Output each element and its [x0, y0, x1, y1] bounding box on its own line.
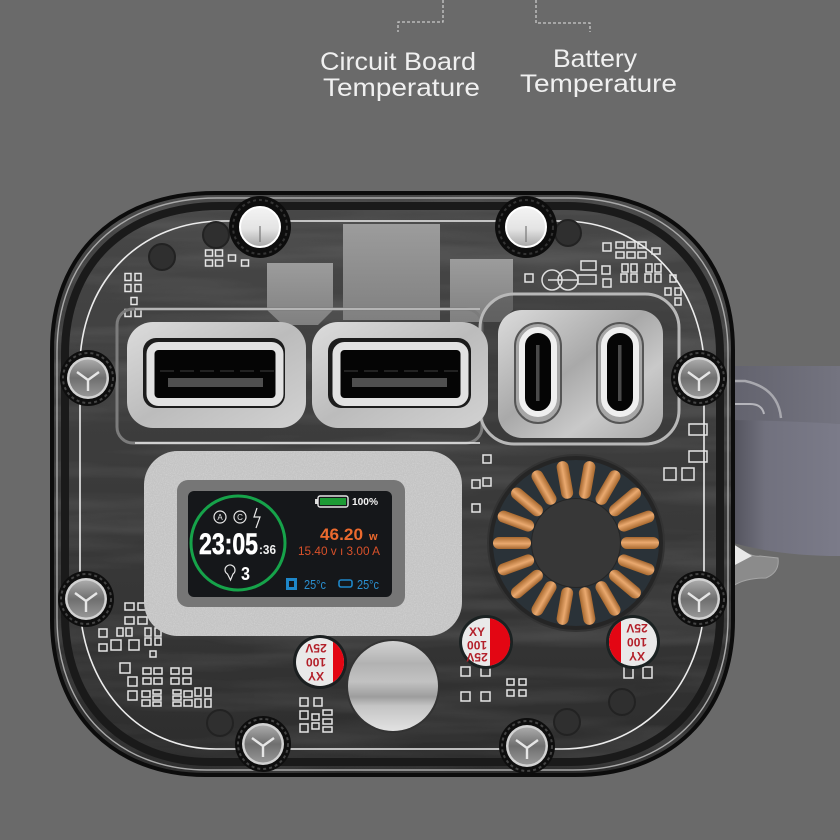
- display module: [144, 451, 462, 636]
- capacitor right: XY: [629, 649, 645, 663]
- gauge ring: [191, 496, 285, 590]
- copper windings: [493, 460, 659, 626]
- screw top left: [229, 196, 291, 258]
- small pcb pads: [99, 242, 707, 732]
- usb port middle: [312, 322, 488, 428]
- leader line: battery: [536, 0, 590, 32]
- screw upper right: [671, 350, 727, 406]
- button knob: [346, 639, 440, 733]
- screw lower right: [671, 571, 727, 627]
- clock seconds: :36: [259, 542, 276, 557]
- light level: 3: [241, 564, 250, 584]
- toroid inductor: [488, 455, 664, 631]
- battery temperature icon: [339, 580, 352, 587]
- leader line: circuit board: [398, 0, 443, 32]
- circuit board temperature: 25°c: [304, 578, 326, 592]
- clock: 23:05: [199, 528, 258, 561]
- capacitor middle: [459, 615, 513, 669]
- label: battery temperature: [520, 0, 677, 98]
- battery percent: 100%: [352, 496, 379, 508]
- battery icon: [315, 496, 348, 507]
- mode icon letters: A: [217, 513, 223, 522]
- screen: [188, 491, 392, 597]
- usb-c port 1: [515, 323, 561, 423]
- infinity trace rings: [542, 270, 578, 290]
- mounting holes: [149, 220, 635, 736]
- mode icon letters: C: [237, 513, 243, 522]
- screw upper left: [60, 350, 116, 406]
- capacitor middle: 100: [467, 638, 487, 652]
- capacitor left: 100: [306, 655, 326, 669]
- screw bottom left: [235, 716, 291, 772]
- capacitor left: 25V: [305, 641, 327, 655]
- text: battery temperature: Battery: [553, 45, 638, 73]
- text: circuit board temperature: Circuit Board: [320, 48, 476, 76]
- usb port left: [127, 322, 306, 428]
- metal tabs: [267, 224, 513, 325]
- screw top right: [495, 196, 557, 258]
- voltage and current: 15.40 v ı 3.00 A: [298, 546, 380, 558]
- capacitor right: 100: [627, 635, 647, 649]
- usb-c transparent housing: [480, 294, 679, 444]
- screw bottom right: [499, 718, 555, 774]
- capacitor right: [606, 615, 660, 669]
- mode icons: [214, 508, 260, 528]
- label: circuit board temperature: [320, 0, 480, 102]
- text: battery temperature: Temperature: [520, 70, 677, 98]
- bulb icon: [225, 565, 235, 580]
- capacitor left: [293, 635, 347, 689]
- usb-c ports plate: [498, 310, 663, 438]
- battery temperature: 25°c: [357, 578, 379, 592]
- power unit: w: [368, 531, 378, 543]
- capacitor middle: 25V: [466, 650, 488, 664]
- screw lower left: [58, 571, 114, 627]
- power reading: 46.20: [320, 525, 363, 544]
- strap: [733, 366, 840, 586]
- device body: [52, 193, 733, 775]
- casing rim: [52, 193, 733, 775]
- circuit board temperature icon: [288, 580, 296, 588]
- usb row transparent housing: [117, 309, 482, 443]
- usb-c port 2: [597, 323, 643, 423]
- screws: [58, 196, 727, 774]
- text: circuit board temperature: Temperature: [323, 74, 480, 102]
- capacitor middle: XY: [469, 625, 485, 639]
- capacitor right: 25V: [626, 621, 648, 635]
- capacitor left: XY: [308, 669, 324, 683]
